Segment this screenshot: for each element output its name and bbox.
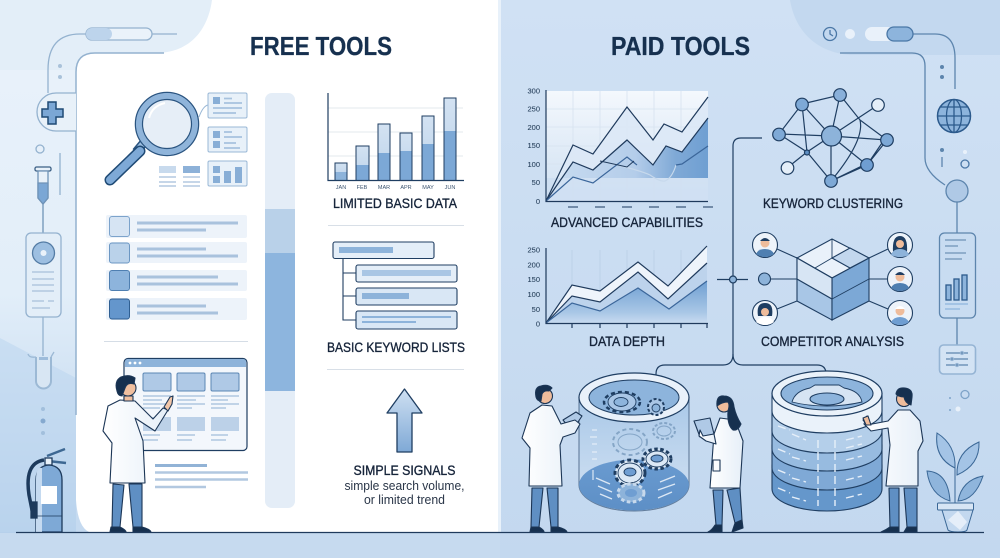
result card 1 [208, 93, 247, 118]
avatar bottom right [888, 300, 912, 326]
mini tables [159, 166, 200, 186]
line chart: data depth: 50 [532, 305, 540, 314]
line chart: advanced capabilities: 200 [527, 123, 540, 132]
divider [328, 224, 464, 226]
line chart: advanced capabilities: 150 [527, 141, 540, 150]
decoration: left side instruments [26, 28, 177, 435]
icon: monitor device [26, 233, 61, 317]
icon: medical cross badge [37, 93, 76, 131]
figure: scientist with clipboard [522, 385, 582, 532]
avatar top right [888, 232, 912, 258]
avatar bottom left [752, 300, 778, 326]
bar chart: limited basic data: JAN [336, 185, 346, 191]
text block: simple signals: or limited trend [364, 492, 445, 507]
icon: globe [938, 100, 970, 132]
vertical progress bar [265, 93, 295, 508]
bar chart: limited basic data: MAR [378, 185, 390, 191]
line chart: data depth: 100 [527, 290, 540, 299]
line chart: data depth: 250 [527, 246, 540, 254]
line chart: advanced capabilities: 50 [532, 178, 540, 187]
label: advanced capabilities: ADVANCED CAPABILITIES [551, 214, 703, 230]
glass data cylinder with gears [579, 373, 689, 511]
network diagram: keyword clustering [773, 89, 893, 187]
text lines [155, 472, 248, 487]
bar chart: limited basic data [328, 93, 464, 191]
line chart: advanced capabilities: 300 [527, 86, 540, 96]
icon: up arrow [387, 389, 422, 452]
line chart: data depth [527, 246, 708, 328]
bar chart: limited basic data: FEB [357, 185, 368, 191]
result card 3 [208, 161, 247, 186]
icon: syringe [35, 167, 51, 233]
icon: clock [824, 28, 836, 40]
avatar top left [752, 232, 778, 258]
figure: scientist with tablet [694, 396, 743, 532]
text lines under browser [155, 464, 207, 467]
text block: simple signals: SIMPLE SIGNALS [354, 462, 456, 478]
label: competitor analysis: COMPETITOR ANALYSIS [761, 333, 904, 349]
line chart: data depth: 0 [536, 320, 540, 328]
bar chart: limited basic data: MAY [422, 185, 434, 191]
gears in cylinder top [604, 392, 664, 415]
line chart: advanced capabilities [527, 86, 713, 207]
cube with competitor avatars [752, 232, 912, 326]
keyword tree diagram [333, 242, 457, 329]
icon: lens node [946, 180, 968, 202]
label: limited basic data: LIMITED BASIC DATA [333, 195, 458, 211]
gear lower [615, 460, 645, 486]
label: data depth: DATA DEPTH [589, 333, 665, 349]
icon: test tube [28, 352, 54, 389]
icon: potted plant [927, 433, 983, 532]
figure: scientist at database [863, 388, 923, 532]
bar chart: limited basic data: APR [400, 185, 412, 191]
icon: fire extinguisher [28, 449, 66, 532]
divider [104, 340, 248, 342]
line chart: advanced capabilities: 250 [527, 104, 540, 114]
icon: sliders panel [940, 345, 976, 374]
icon: data device [940, 233, 976, 318]
panel: free tools background [0, 0, 501, 558]
line chart: data depth: 150 [527, 275, 540, 284]
decoration: right side instruments [824, 27, 976, 412]
avatar middle right [888, 266, 912, 292]
icon: magnifying glass with result cards [110, 92, 247, 186]
title: free tools: FREE TOOLS [250, 31, 392, 61]
browser window mockup [124, 358, 247, 450]
title: paid tools: PAID TOOLS [611, 31, 750, 61]
gear bottom [618, 484, 644, 502]
line chart: advanced capabilities: 100 [527, 160, 540, 169]
line chart: advanced capabilities: 0 [536, 197, 540, 206]
panel: paid tools background [500, 0, 1000, 558]
result card 2 [208, 127, 247, 152]
label: basic keyword lists: BASIC KEYWORD LISTS [327, 339, 465, 355]
decoration: paid panel corner blob [790, 0, 1000, 55]
line chart: data depth: 200 [527, 260, 540, 270]
gear upper [643, 449, 671, 469]
keyword list rows [106, 215, 247, 320]
node left [758, 273, 770, 285]
ground line [16, 532, 984, 534]
figure: scientist pointing at browser [103, 376, 173, 532]
divider [327, 368, 464, 370]
label: keyword clustering: KEYWORD CLUSTERING [763, 195, 903, 211]
text block: simple signals: simple search volume, [344, 478, 464, 493]
connector lines [656, 138, 826, 393]
bar chart: limited basic data: JUN [445, 185, 455, 191]
text block: simple signals [344, 462, 464, 507]
stacked database cylinder [772, 371, 882, 511]
